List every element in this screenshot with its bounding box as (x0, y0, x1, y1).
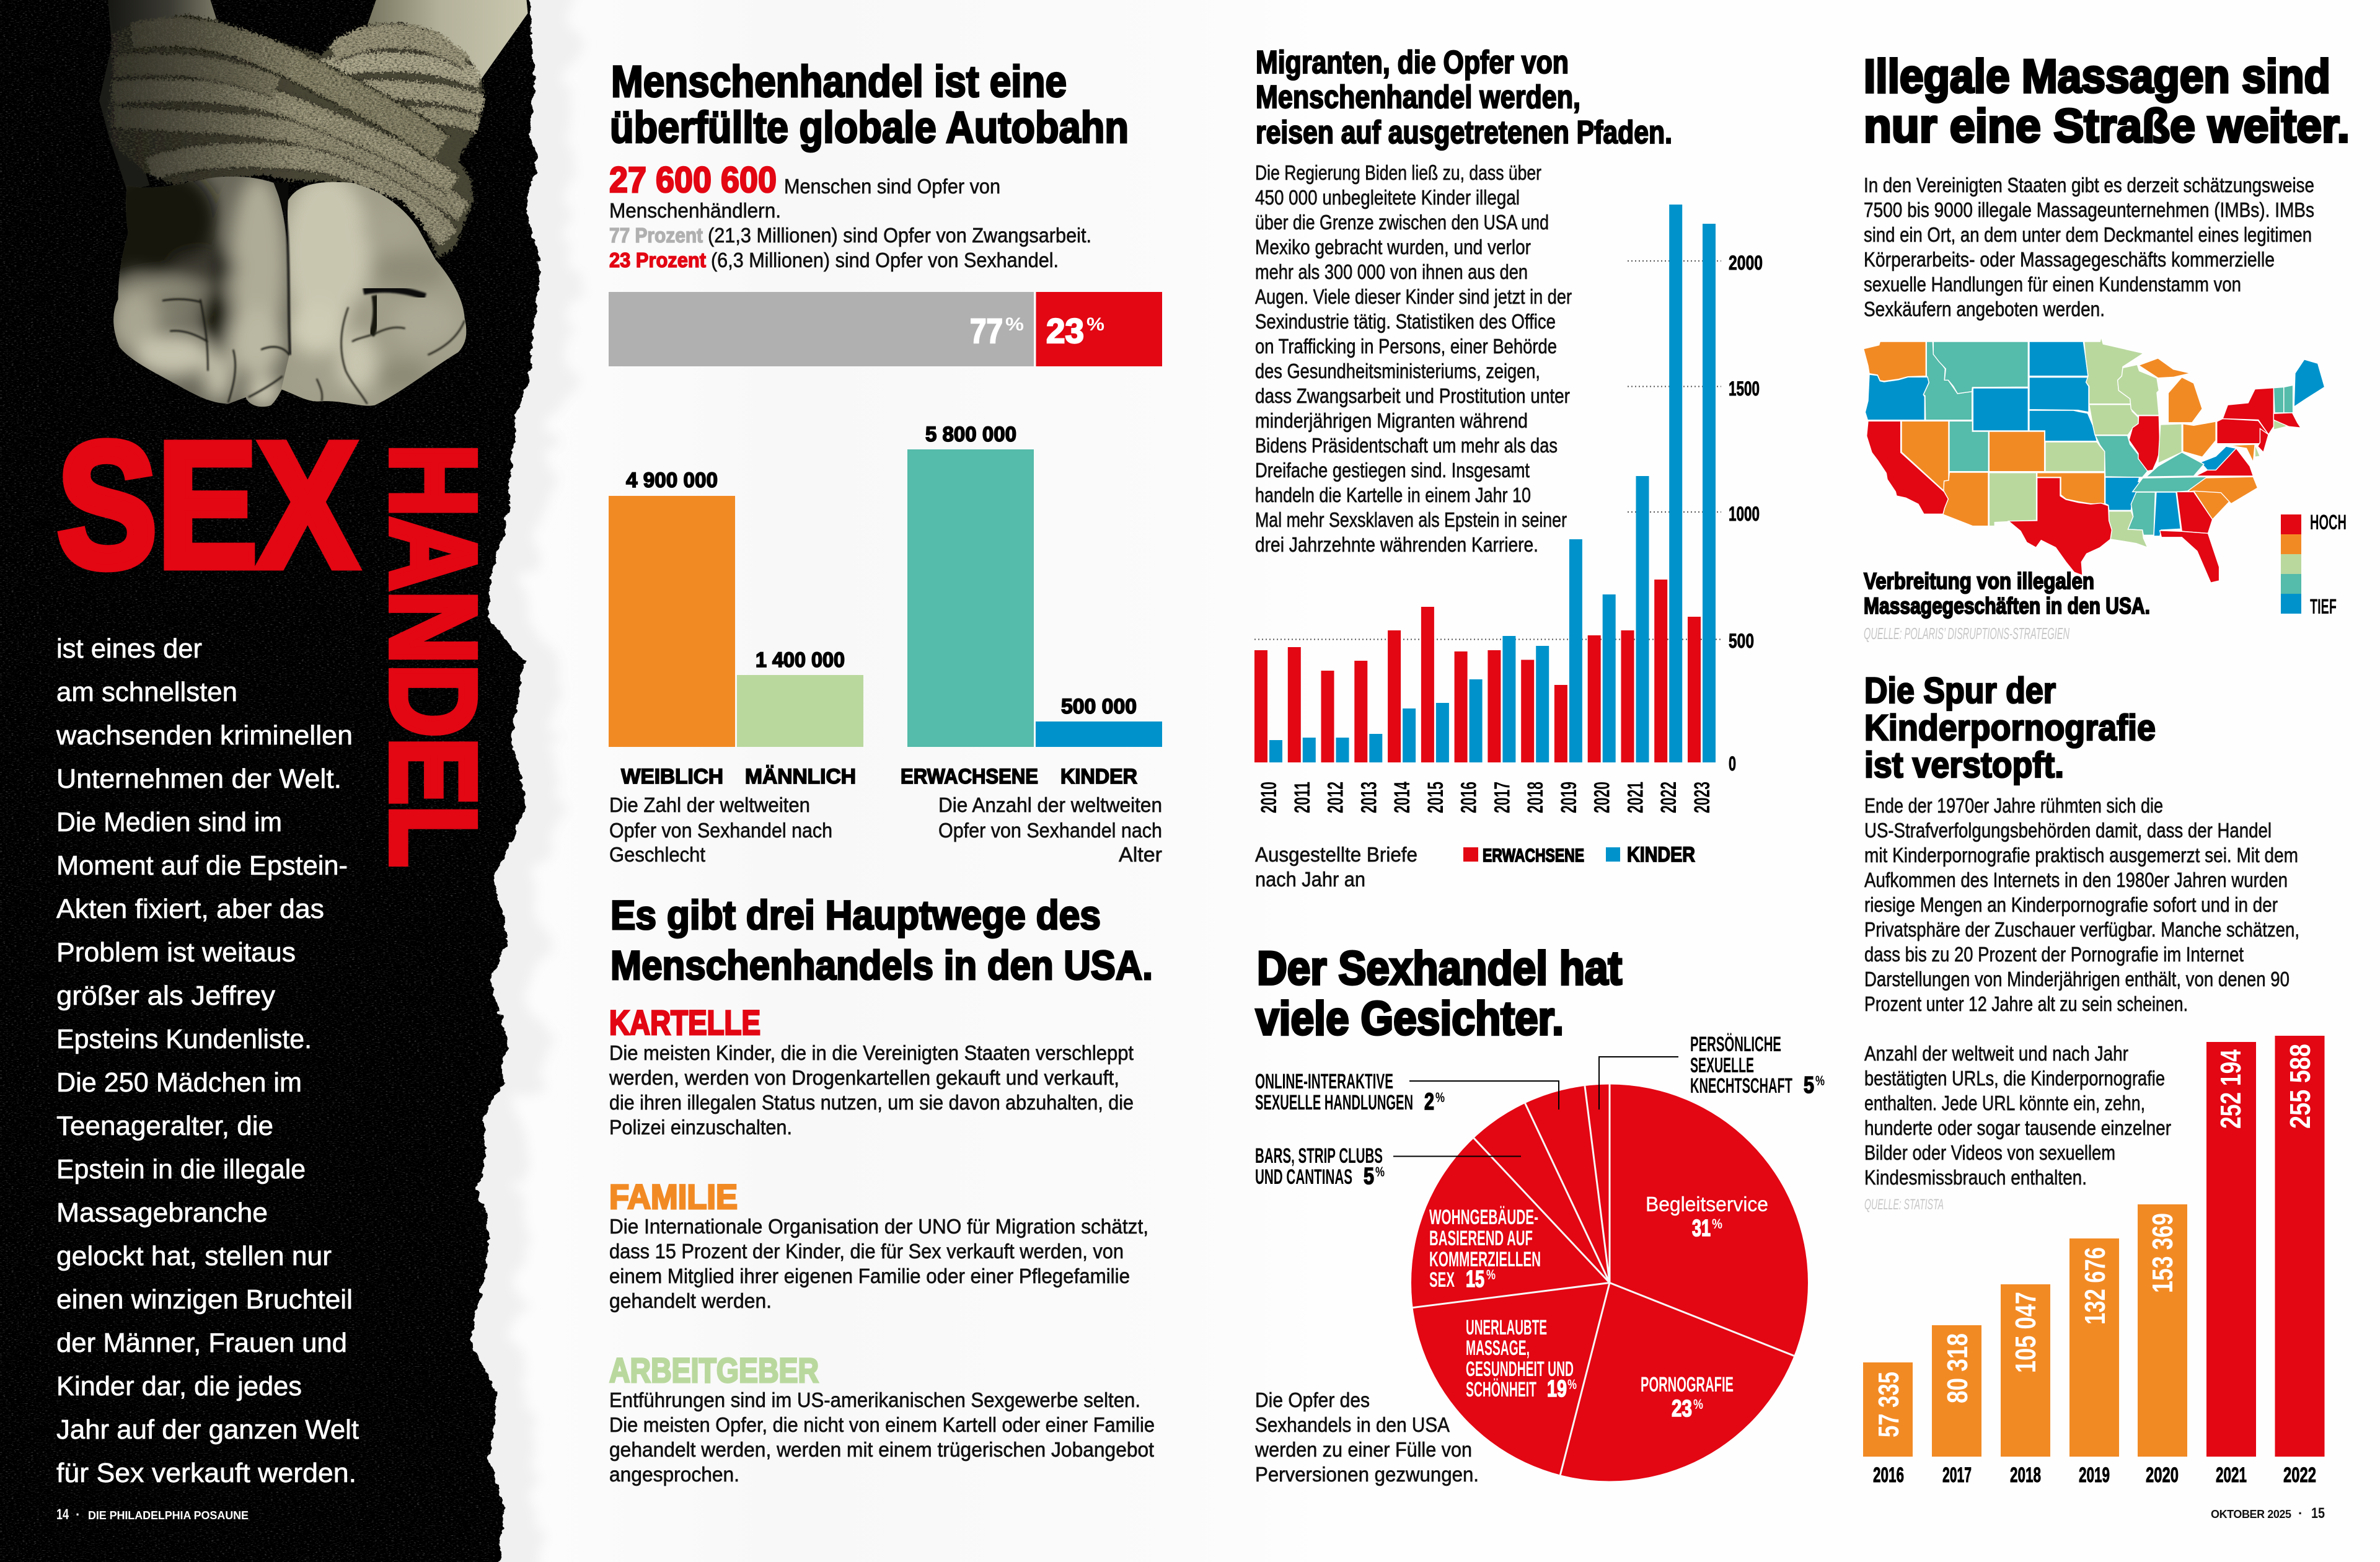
text block: child pornography: Privatsphäre der Zuschauer verfügbar. Manche schätzen, (1864, 918, 2299, 941)
text block: intro: ist eines der (56, 633, 202, 664)
heading: illegal massages (1864, 50, 2350, 152)
chart: letters by year: 500 (1729, 630, 1754, 652)
text block: Biden: mehr als 300 000 von ihnen aus den (1255, 260, 1528, 283)
chart: URLs by year: 80 318 (1941, 1333, 1973, 1403)
chart: victims by gender (609, 469, 863, 788)
title: HANDEL vertical: HANDEL (366, 444, 501, 867)
chart: stacked 77/23 bar: 77 (970, 311, 1003, 350)
text block: intro: Unternehmen der Welt. (56, 764, 342, 794)
chart: US map (1864, 337, 2325, 583)
text block: intro: Moment auf die Epstein- (56, 850, 348, 881)
text block: Biden: Bidens Präsidentschaft um mehr als das (1255, 434, 1558, 457)
chart: URLs by year: 252 194 (2215, 1049, 2247, 1129)
callout: bars and strip clubs: 5 (1364, 1163, 1374, 1189)
chart: letters by year: 0 (1729, 752, 1736, 775)
text block: Biden: Augen. Viele dieser Kinder sind jetzt in der (1255, 285, 1572, 308)
text block: Biden: drei Jahrzehnte währenden Karriere. (1255, 533, 1538, 556)
heading: illegal massages: nur eine Straße weiter. (1864, 100, 2350, 152)
heading: three routes: Es gibt drei Hauptwege des (610, 892, 1101, 938)
chart: stacked 77/23 bar (609, 292, 1162, 366)
heading: three routes: Menschenhandels in den USA. (610, 942, 1153, 988)
chart: victims by gender: 1 400 000 (756, 648, 845, 672)
text block: intro: Epsteins Kundenliste. (56, 1024, 312, 1054)
chart: stacked 77/23 bar: % (1005, 314, 1024, 335)
chart: victims by gender: WEIBLICH (621, 765, 723, 788)
text block: Biden: Dreifache gestiegen sind. Insgesamt (1255, 459, 1530, 482)
callout: online interactive: % (1435, 1090, 1445, 1105)
text block: statistics (609, 160, 1091, 271)
footer: right page number: 15 (2311, 1505, 2325, 1522)
heading: three routes (610, 892, 1153, 988)
chart: letters by year: 2011 (1290, 782, 1315, 813)
panel: Familie: dass 15 Prozent der Kinder, die für Sex verkauft werden, von (609, 1240, 1124, 1263)
text block: Biden: minderjährigen Migranten während (1255, 409, 1528, 432)
chart: letters by year: 2021 (1624, 782, 1647, 813)
chart: letters by year: 2013 (1357, 782, 1381, 813)
footer: left page number: 14 (56, 1506, 69, 1523)
text block: statistics: 77 Prozent (609, 224, 703, 247)
chart: pie: WOHNGEBÄUDE- (1429, 1206, 1538, 1229)
text block: pie caption: Sexhandels in den USA (1255, 1413, 1450, 1436)
panel: Familie (609, 1177, 1148, 1312)
caption: letters: nach Jahr an (1255, 868, 1365, 891)
legend: adults and children: ERWACHSENE (1483, 845, 1584, 866)
panel: Arbeitgeber: ARBEITGEBER (609, 1351, 819, 1390)
heading: child pornography: ist verstopft. (1864, 745, 2064, 785)
text block: intro: wachsenden kriminellen (56, 720, 353, 751)
callout: personal servitude (1599, 1033, 1825, 1110)
chart: victims by gender: MÄNNLICH (745, 765, 856, 788)
caption: age chart: Alter (1119, 843, 1162, 866)
footer: right page number: · (2298, 1506, 2303, 1521)
chart: letters by year: 2019 (1557, 782, 1581, 813)
caption: age chart: Die Anzahl der weltweiten (938, 793, 1162, 816)
panel: Familie: gehandelt werden. (609, 1289, 772, 1312)
chart: letters by year: 2017 (1490, 782, 1514, 813)
text block: URLs: hunderte oder sogar tausende einzelner (1864, 1116, 2171, 1139)
text block: Biden: handeln die Kartelle in einem Jahr 10 (1255, 483, 1531, 506)
text block: child pornography: Aufkommen des Internets in den 1980er Jahren wurden (1864, 868, 2288, 891)
text block: statistics: Menschenhändlern. (609, 199, 781, 222)
panel: left black torn paper (0, 0, 545, 1562)
chart: URLs by year: 2017 (1942, 1463, 1972, 1487)
text block: URLs: Anzahl der weltweit und nach Jahr (1864, 1042, 2128, 1065)
legend: adults and children: KINDER (1627, 843, 1695, 867)
heading: Migranten: reisen auf ausgetretenen Pfaden. (1256, 115, 1672, 151)
text block: Biden: Sexindustrie tätig. Statistiken des Office (1255, 310, 1556, 333)
title: SEX: SEX (57, 405, 358, 605)
text block: massage: 7500 bis 9000 illegale Massageunternehmen (IMBs). IMBs (1864, 198, 2314, 221)
panel: Kartelle: die ihren illegalen Status nutzen, um sie davon abzuhalten, die (609, 1091, 1134, 1114)
chart: letters by year: 2023 (1690, 782, 1714, 813)
source: Polaris: QUELLE: POLARIS’ DISRUPTIONS-STRATEGIEN (1864, 624, 2069, 643)
text block: massage: Sexkäufern angeboten werden. (1864, 298, 2105, 320)
panel: Arbeitgeber: gehandelt werden, werden mit einem trügerischen Jobangebot (609, 1438, 1154, 1461)
panel: Kartelle: KARTELLE (609, 1003, 760, 1042)
callout: personal servitude: % (1815, 1073, 1825, 1088)
heading: Menschenhandel: überfüllte globale Autobahn (610, 104, 1129, 152)
text block: statistics: (21,3 Millionen) sind Opfer von Zwangsarbeit. (708, 224, 1091, 247)
chart: URLs by year: 2018 (2010, 1463, 2041, 1487)
chart: pie: PORNOGRAFIE (1641, 1373, 1734, 1397)
text block: Biden: Die Regierung Biden ließ zu, dass über (1255, 161, 1541, 184)
callout: personal servitude: PERSÖNLICHE (1690, 1033, 1781, 1056)
chart: letters by year: 2020 (1590, 782, 1615, 813)
heading: child pornography: Die Spur der (1864, 671, 2056, 711)
callout: bars and strip clubs (1255, 1144, 1521, 1189)
text block: Biden: dass Zwangsarbeit und Prostitution unter (1255, 384, 1570, 407)
text block: statistics: Menschen sind Opfer von (784, 175, 1000, 198)
callout: personal servitude: 5 (1804, 1072, 1814, 1098)
text block: intro: Massagebranche (56, 1198, 268, 1228)
callout: bars and strip clubs: % (1375, 1164, 1385, 1180)
chart: URLs by year: 132 676 (2079, 1247, 2111, 1325)
text block: statistics: 23 Prozent (609, 249, 706, 271)
chart: URLs by year: 2022 (2283, 1463, 2316, 1487)
chart: pie: SEX (1429, 1268, 1455, 1292)
text block: URLs: bestätigten URLs, die Kinderpornografie (1864, 1067, 2165, 1090)
text block: pie caption (1254, 1388, 1479, 1486)
text block: Biden: Mexiko gebracht wurden, und verlor (1255, 236, 1531, 258)
panel: Kartelle: werden, werden von Drogenkartellen gekauft und verkauft, (609, 1066, 1119, 1089)
chart: victims by age: KINDER (1060, 765, 1137, 788)
source: Statista: QUELLE: STATISTA (1864, 1196, 1944, 1213)
chart: letters by year: 2010 (1257, 782, 1281, 813)
heading: Menschenhandel: Menschenhandel ist eine (611, 58, 1067, 107)
text block: statistics: (6,3 Millionen) sind Opfer von Sexhandel. (711, 249, 1059, 271)
caption: gender chart (609, 793, 832, 866)
footer: left page number (56, 1506, 249, 1523)
text block: intro: Epstein in die illegale (56, 1154, 306, 1185)
callout: online interactive (1255, 1070, 1559, 1115)
heading: Der Sexhandel: Der Sexhandel hat (1257, 942, 1622, 995)
footer: left page number: · (76, 1507, 80, 1522)
text block: Biden: des Gesundheitsministeriums, zeigen, (1255, 360, 1540, 382)
text block: Biden (1255, 161, 1572, 556)
chart: pie: MASSAGE, (1466, 1336, 1530, 1360)
chart: URLs by year: 255 588 (2284, 1044, 2316, 1129)
text block: intro: Jahr auf der ganzen Welt (56, 1414, 359, 1445)
heading: child pornography: Kinderpornografie (1864, 708, 2156, 748)
text block: pie caption: Die Opfer des (1255, 1388, 1370, 1411)
panel: Kartelle (609, 1003, 1134, 1139)
text block: pie caption: Perversionen gezwungen. (1255, 1463, 1479, 1486)
chart: letters by year: 2000 (1729, 252, 1763, 274)
callout: online interactive: 2 (1424, 1089, 1434, 1115)
panel: Kartelle: Polizei einzuschalten. (609, 1116, 792, 1139)
text block: Biden: 450 000 unbegleitete Kinder illegal (1255, 186, 1520, 209)
chart: pie: Begleitservice (1646, 1193, 1768, 1216)
text block: URLs: Kindesmissbrauch enthalten. (1864, 1166, 2087, 1189)
panel: Arbeitgeber: Die meisten Opfer, die nicht von einem Kartell oder einer Familie (609, 1413, 1155, 1436)
panel: Arbeitgeber: angesprochen. (609, 1463, 739, 1486)
chart: victims by age: 5 800 000 (925, 423, 1016, 446)
text block: intro: Problem ist weitaus (56, 937, 296, 968)
text block: intro: für Sex verkauft werden. (56, 1458, 356, 1488)
footer: right page number: OKTOBER 2025 (2211, 1508, 2291, 1520)
heading: Der Sexhandel: viele Gesichter. (1256, 992, 1564, 1045)
photo: hands bound with rope (97, 0, 528, 413)
text block: massage: Körperarbeits- oder Massagegeschäfts kommerzielle (1864, 248, 2275, 271)
text block: URLs (1864, 1042, 2171, 1189)
chart: pie: SCHÖNHEIT (1466, 1378, 1536, 1401)
footer: right page number (2211, 1505, 2325, 1522)
chart: letters by year: 2014 (1390, 782, 1414, 813)
chart: victims by age (901, 423, 1162, 788)
callout: online interactive: SEXUELLE HANDLUNGEN (1255, 1091, 1413, 1114)
heading: Migranten: Migranten, die Opfer von (1256, 45, 1569, 81)
text block: Biden: Mal mehr Sexsklaven als Epstein in seiner (1255, 508, 1567, 531)
text block: intro (56, 633, 359, 1488)
caption: age chart: Opfer von Sexhandel nach (938, 819, 1162, 842)
chart: stacked 77/23 bar: 23 (1046, 311, 1084, 350)
text block: intro: Die Medien sind im (56, 807, 282, 837)
text block: child pornography: Darstellungen von Minderjährigen enthält, von denen 90 (1864, 968, 2290, 991)
chart: pie: % (1486, 1267, 1496, 1282)
text block: intro: Akten fixiert, aber das (56, 894, 324, 924)
heading: Der Sexhandel (1256, 942, 1622, 1045)
text block: child pornography (1864, 794, 2299, 1015)
chart: URLs by year (1863, 1036, 2324, 1487)
chart: victims by gender: 4 900 000 (626, 469, 718, 492)
text block: intro: Teenageralter, die (56, 1111, 273, 1141)
text block: child pornography: riesige Mengen an Kinderpornografie sofort und in der (1864, 893, 2278, 916)
chart: URLs by year: 2019 (2079, 1463, 2110, 1487)
text block: intro: Kinder dar, die jedes (56, 1371, 302, 1401)
text block: URLs: enthalten. Jede URL könnte ein, zehn, (1864, 1092, 2145, 1114)
chart: letters by year: 2012 (1324, 782, 1347, 813)
chart: URLs by year: 2021 (2216, 1463, 2247, 1487)
text block: intro: der Männer, Frauen und (56, 1328, 347, 1358)
caption: gender chart: Opfer von Sexhandel nach (609, 819, 832, 842)
legend: adults and children (1463, 843, 1695, 867)
caption: age chart (938, 793, 1162, 866)
chart: pie: 15 (1466, 1266, 1484, 1292)
caption: letters: Ausgestellte Briefe (1255, 843, 1417, 866)
chart: URLs by year: 153 369 (2146, 1213, 2179, 1293)
chart: stacked 77/23 bar: % (1086, 314, 1104, 335)
caption: map: Massagegeschäften in den USA. (1864, 593, 2150, 619)
chart: victims by age: ERWACHSENE (901, 765, 1038, 788)
chart: victims by age: 500 000 (1061, 695, 1137, 718)
text block: intro: einen winzigen Bruchteil (56, 1284, 353, 1315)
chart: letters by year: 1000 (1729, 503, 1760, 525)
chart: pie: % (1567, 1377, 1577, 1392)
caption: map (1864, 568, 2150, 619)
chart: pie: KOMMERZIELLEN (1429, 1248, 1541, 1271)
chart: pie: 23 (1672, 1396, 1692, 1422)
chart: pie: UNERLAUBTE (1466, 1316, 1547, 1339)
text block: child pornography: Prozent unter 12 Jahre alt zu sein scheinen. (1864, 992, 2188, 1015)
chart: pie: BASIEREND AUF (1429, 1227, 1533, 1250)
panel: Familie: Die Internationale Organisation der UNO für Migration schätzt, (609, 1215, 1148, 1238)
legend: map scale (2281, 511, 2347, 619)
chart: pie: % (1712, 1216, 1722, 1232)
legend: map scale: TIEF (2310, 595, 2337, 619)
callout: online interactive: ONLINE-INTERAKTIVE (1255, 1070, 1393, 1093)
heading: illegal massages: Illegale Massagen sind (1864, 50, 2330, 103)
chart: URLs by year: 2020 (2146, 1463, 2179, 1487)
panel: Arbeitgeber: Entführungen sind im US-amerikanischen Sexgewerbe selten. (609, 1388, 1140, 1411)
chart: URLs by year: 2016 (1873, 1463, 1904, 1487)
panel: Kartelle: Die meisten Kinder, die in die Vereinigten Staaten verschleppt (609, 1041, 1134, 1064)
heading: child pornography (1864, 671, 2156, 785)
chart: letters by year: 2015 (1424, 782, 1448, 813)
chart: letters by year: 1500 (1729, 377, 1760, 400)
heading: Menschenhandel (610, 58, 1129, 152)
chart: pie: GESUNDHEIT UND (1466, 1357, 1574, 1381)
chart: letters by year: 2018 (1523, 782, 1548, 813)
text block: URLs: Bilder oder Videos von sexuellem (1864, 1141, 2115, 1164)
heading: Migranten (1256, 45, 1672, 151)
caption: map: Verbreitung von illegalen (1864, 568, 2094, 594)
callout: bars and strip clubs: BARS, STRIP CLUBS (1255, 1144, 1383, 1168)
chart: URLs by year: 105 047 (2009, 1292, 2042, 1373)
heading: Migranten: Menschenhandel werden, (1256, 79, 1580, 115)
text block: Biden: über die Grenze zwischen den USA und (1255, 211, 1549, 234)
chart: letters by year: 2022 (1657, 782, 1681, 813)
footer: left page number: DIE PHILADELPHIA POSAUNE (88, 1509, 249, 1522)
text block: pie caption: werden zu einer Fülle von (1254, 1438, 1472, 1461)
chart: pie: % (1693, 1397, 1703, 1412)
text block: intro: gelockt hat, stellen nur (56, 1241, 332, 1271)
text block: Biden: on Trafficking in Persons, einer Behörde (1255, 335, 1557, 358)
legend: map scale: HOCH (2310, 511, 2347, 534)
caption: gender chart: Die Zahl der weltweiten (609, 793, 810, 816)
panel: Familie: FAMILIE (609, 1177, 738, 1216)
callout: bars and strip clubs: UND CANTINAS (1255, 1165, 1352, 1189)
text block: child pornography: mit Kinderpornografie praktisch ausgemerzt sei. Mit dem (1864, 844, 2298, 867)
text block: statistics: 27 600 600 (609, 160, 777, 200)
caption: gender chart: Geschlecht (609, 843, 705, 866)
chart: pie: 31 (1692, 1216, 1711, 1242)
chart: pie: 19 (1547, 1376, 1567, 1402)
text block: intro: Die 250 Mädchen im (56, 1067, 302, 1098)
text block: child pornography: dass bis zu 20 Prozent der Pornografie im Internet (1864, 943, 2244, 966)
chart: URLs by year: 57 335 (1872, 1372, 1905, 1437)
text block: child pornography: Ende der 1970er Jahre rühmten sich die (1864, 794, 2163, 817)
chart: letters by year: 2016 (1457, 782, 1481, 813)
text block: intro: größer als Jeffrey (56, 981, 275, 1011)
callout: personal servitude: KNECHTSCHAFT (1690, 1074, 1792, 1098)
text block: massage: sexuelle Handlungen für einen Kundenstamm von (1864, 273, 2241, 296)
chart: pie (1411, 1084, 1808, 1481)
callout: personal servitude: SEXUELLE (1690, 1054, 1754, 1077)
chart: letters by year (1254, 205, 1763, 813)
panel: Familie: einem Mitglied ihrer eigenen Familie oder einer Pflegefamilie (609, 1264, 1130, 1287)
caption: letters (1255, 843, 1417, 891)
text block: child pornography: US-Strafverfolgungsbehörden damit, dass der Handel (1864, 819, 2272, 842)
text block: massage (1864, 174, 2314, 320)
panel: Arbeitgeber (609, 1351, 1155, 1486)
text block: intro: am schnellsten (56, 677, 237, 707)
